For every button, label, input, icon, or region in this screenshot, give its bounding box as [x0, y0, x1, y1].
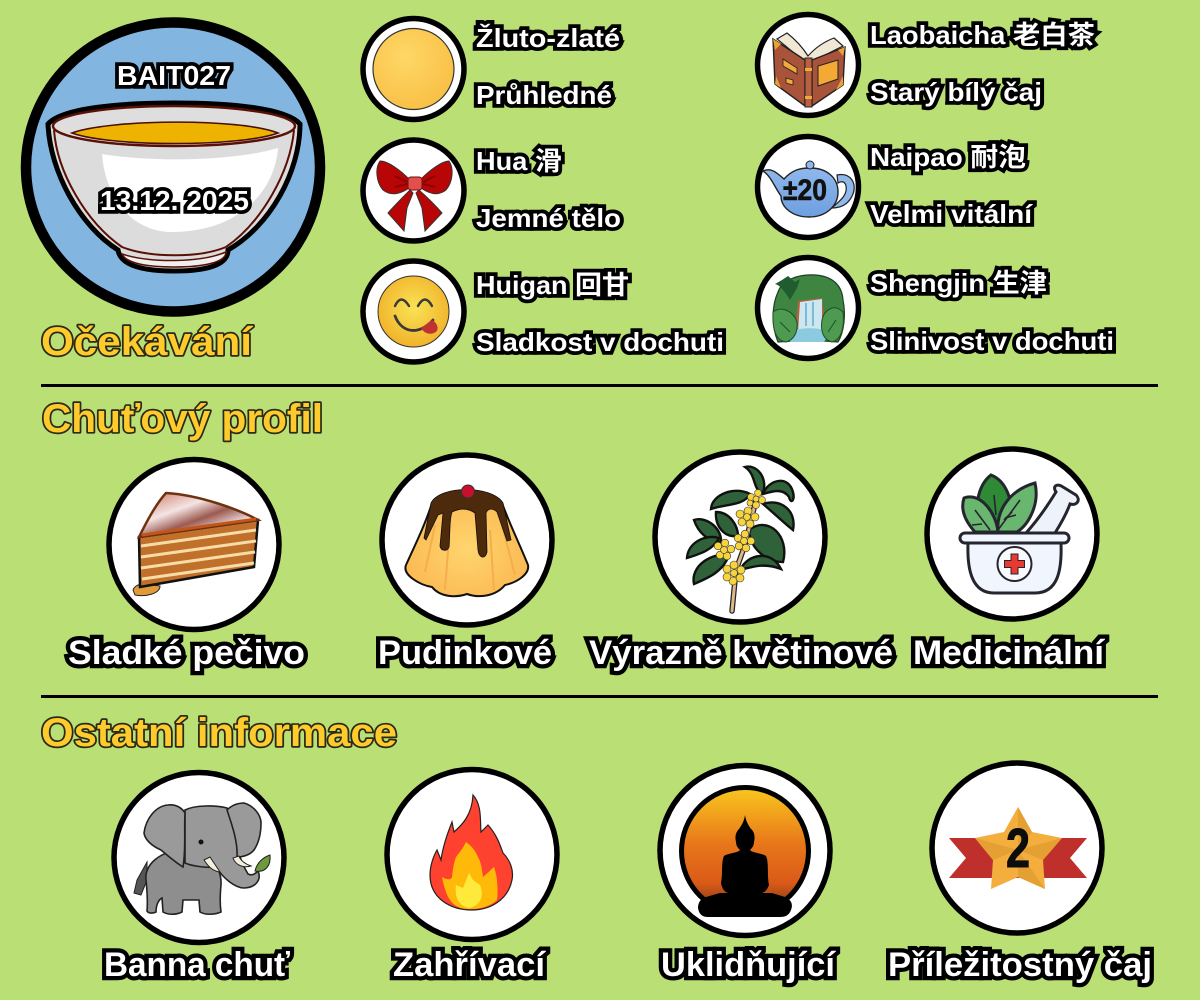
batch code: BAIT027	[117, 60, 231, 91]
text: very vital: Velmi vitální	[870, 199, 1033, 229]
panel: tea badge	[26, 22, 320, 312]
label: strongly floral: Výrazně květinové	[589, 634, 893, 672]
text: clarity: Průhledné	[476, 80, 612, 110]
label: occasional tea: Příležitostný čaj	[888, 946, 1152, 984]
date: 13.12. 2025	[100, 185, 249, 216]
icon: flame	[387, 770, 557, 940]
label: calming: Uklidňující	[661, 946, 837, 984]
icon: mortar and herbs	[927, 449, 1097, 619]
icon: meditating buddha	[660, 766, 830, 936]
icon: tea bowl	[48, 103, 300, 271]
icon: star rank	[932, 763, 1102, 933]
label: warming: Zahřívací	[393, 946, 547, 984]
icon: bow	[363, 140, 464, 241]
icon: star rank: 2	[1006, 817, 1030, 879]
icon: cake	[109, 460, 279, 630]
badge circle	[26, 22, 320, 312]
icon: teapot: ±20	[783, 174, 827, 207]
text: salivation: Slinivost v dochuti	[870, 326, 1114, 356]
icon: waterfall	[758, 258, 858, 358]
icon: golden colour	[363, 18, 464, 120]
text: colour: Žluto-zlaté	[476, 23, 620, 53]
heading: flavour profile: Chuťový profil	[42, 397, 323, 441]
icon: smiley	[363, 261, 464, 362]
label: pudding: Pudinkové	[378, 634, 552, 672]
divider	[41, 695, 1158, 698]
heading: other information: Ostatní informace	[41, 711, 397, 755]
text: sweet aftertaste: Sladkost v dochuti	[476, 327, 724, 357]
icon: pudding	[382, 455, 552, 625]
text: laobaicha: Laobaicha 老白茶	[870, 20, 1095, 50]
label: banna flavour: Banna chuť	[104, 946, 291, 984]
divider	[41, 384, 1158, 387]
text: huigan: Huigan 回甘	[476, 270, 629, 300]
icon: teapot	[758, 136, 858, 238]
text: shengjin: Shengjin 生津	[870, 268, 1047, 298]
text: old white tea: Starý bílý čaj	[870, 77, 1042, 107]
text: naipao: Naipao 耐泡	[870, 142, 1026, 172]
icon: osmanthus branch	[655, 452, 825, 622]
label: sweet pastry: Sladké pečivo	[68, 634, 305, 672]
text: smooth body: Jemné tělo	[476, 203, 621, 233]
icon: elephant	[114, 772, 284, 942]
label: medicinal: Medicinální	[913, 634, 1106, 672]
text: hua: Hua 滑	[476, 146, 562, 176]
heading: expectation: Očekávání	[41, 320, 254, 364]
icon: book	[758, 14, 858, 116]
